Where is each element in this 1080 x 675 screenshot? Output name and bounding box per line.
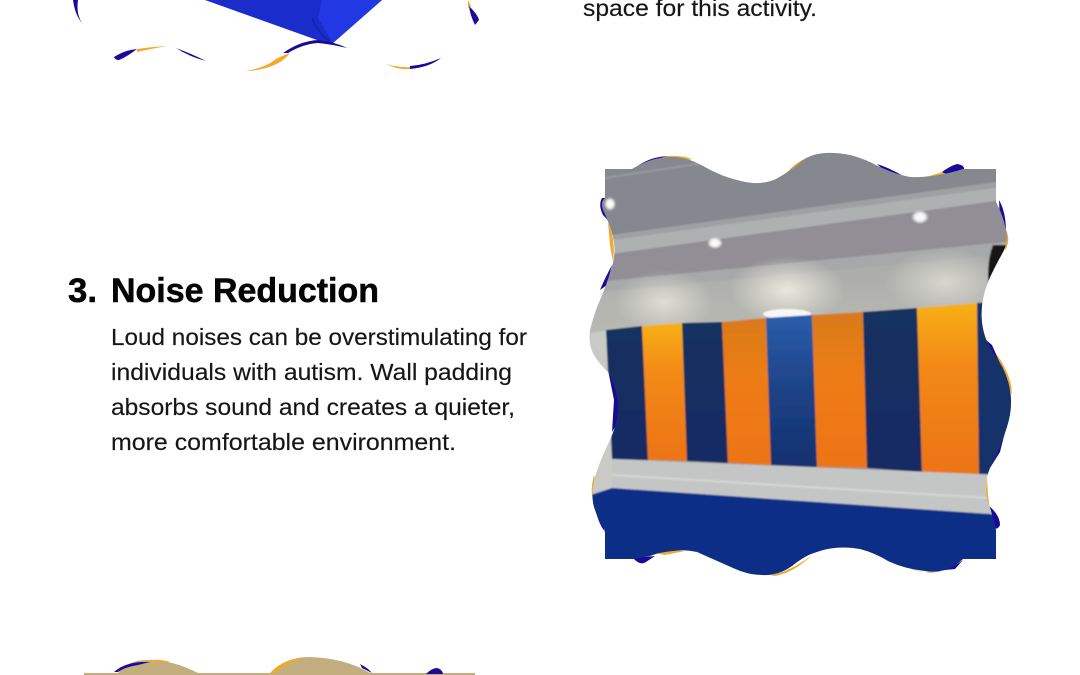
heading: 3. Noise Reduction: 3. bbox=[68, 272, 97, 310]
image detail: dark curtain at right bbox=[987, 244, 1006, 284]
heading: 3. Noise Reduction: Noise Reduction bbox=[111, 272, 379, 310]
text block: noise reduction description bbox=[111, 324, 527, 455]
decorative wave accents of the top image bbox=[73, 0, 479, 71]
image detail: cornice bands bbox=[604, 163, 1007, 292]
text block: noise reduction description: individuals with autism. Wall padding bbox=[111, 359, 512, 385]
image: room with orange and navy acoustic wall panels bbox=[590, 152, 1012, 576]
image detail: blue carpet bbox=[592, 487, 996, 576]
text block: noise reduction description: more comfortable environment. bbox=[111, 429, 456, 455]
text block: noise reduction description: absorbs sound and creates a quieter, bbox=[111, 394, 515, 420]
image detail: baseboard bbox=[614, 458, 992, 516]
image detail: upper wall bbox=[590, 255, 990, 334]
decorative wave accents behind the wall photo bbox=[591, 153, 1012, 576]
image detail: left white wall bbox=[590, 331, 614, 496]
image detail: ceiling lights and glow bbox=[604, 197, 988, 324]
image: beige photo top with wave edge (next section) bbox=[84, 657, 475, 675]
image: blue padded mat corner (top section) bbox=[205, 0, 382, 43]
image detail: wall panels bbox=[606, 300, 1025, 476]
text block: noise reduction description: Loud noises can be overstimulating for bbox=[111, 324, 527, 350]
